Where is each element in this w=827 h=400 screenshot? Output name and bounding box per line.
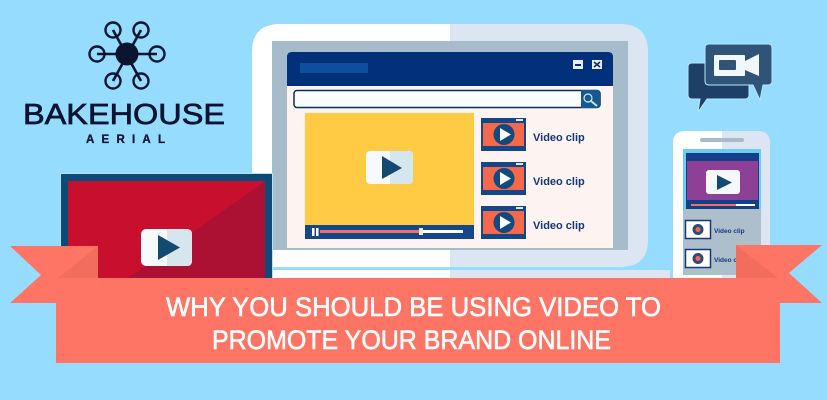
play button xyxy=(141,229,192,266)
right ribbon tail xyxy=(736,245,822,303)
laptop lid xyxy=(252,24,450,267)
clip 2 xyxy=(481,162,585,195)
red video panel xyxy=(60,173,273,279)
window buttons xyxy=(573,60,583,69)
laptop base xyxy=(272,270,450,278)
banner title line 2: PROMOTE YOUR BRAND ONLINE xyxy=(212,325,611,355)
icon: video chat bubbles xyxy=(688,44,772,112)
play button xyxy=(366,151,413,184)
logo wordmark: BAKEHOUSE xyxy=(23,99,225,131)
phone play button xyxy=(706,170,740,194)
smartphone: Video clip xyxy=(714,257,745,264)
logo subtitle: AERIAL xyxy=(86,134,165,146)
logo: Bakehouse Aerial xyxy=(23,22,225,146)
banner body xyxy=(56,278,780,363)
title bar xyxy=(287,52,613,86)
banner title: WHY YOU SHOULD BE USING VIDEO TO xyxy=(166,292,661,322)
icon: drone xyxy=(90,22,164,88)
smartphone: Video clip xyxy=(714,228,745,235)
clip 3: Video clip xyxy=(533,220,585,232)
clip 3 xyxy=(481,206,585,239)
left ribbon tail xyxy=(10,246,98,303)
phone clip list xyxy=(683,209,761,275)
laptop screen xyxy=(272,41,628,250)
search bar xyxy=(294,90,600,108)
player controls xyxy=(305,225,474,239)
search button xyxy=(581,90,600,108)
laptop xyxy=(252,24,670,278)
ribbon banner xyxy=(10,245,822,363)
clip 2: Video clip xyxy=(533,176,585,188)
clip 1 xyxy=(481,118,585,151)
phone screen xyxy=(683,149,761,209)
browser window xyxy=(287,52,613,248)
smartphone xyxy=(673,131,770,280)
clip 1: Video clip xyxy=(533,132,585,144)
main video player xyxy=(305,113,474,239)
